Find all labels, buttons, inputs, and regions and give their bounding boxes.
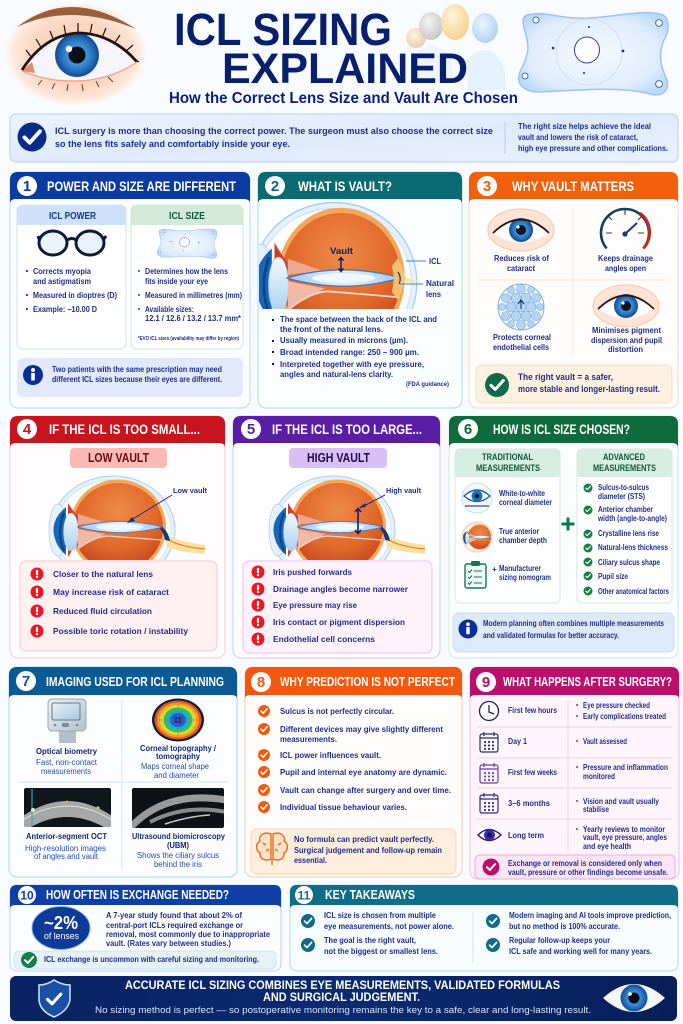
natural lens label: Natural	[426, 278, 454, 288]
eye cross-section: low vault	[48, 476, 205, 560]
footer statement	[95, 980, 591, 1016]
card: advanced measurements: ADVANCED	[603, 452, 645, 462]
card: advanced measurements: Crystalline lens rise	[598, 529, 659, 538]
badge 6: 6	[464, 421, 472, 438]
takeaway: right vault	[301, 936, 438, 956]
list: high vault risks	[243, 561, 432, 653]
badge 1	[17, 176, 37, 196]
topography text: and diameter	[154, 771, 199, 780]
natural lens label: lens	[426, 289, 441, 299]
list: high vault risks: Endothelial cell concerns	[273, 634, 375, 644]
callout: surgical judgement: essential.	[294, 855, 327, 865]
card: advanced measurements: Anterior chamber	[598, 505, 653, 514]
vault explanation: (FDA guidance)	[406, 381, 449, 388]
panel 10: how often is exchange needed	[10, 885, 281, 971]
callout: exchange uncommon	[14, 951, 276, 969]
benefit: drainage	[598, 254, 654, 273]
icon: ICL lens	[519, 13, 668, 95]
title	[174, 4, 468, 93]
badge 10	[18, 886, 36, 904]
eye cross-section: high vault	[268, 476, 425, 560]
image: anterior-segment OCT	[24, 788, 111, 827]
benefit: endothelium: endothelial cells	[493, 343, 549, 352]
list: high vault risks: Iris contact or pigment dispersion	[273, 617, 405, 627]
timeline: long term: and eye health	[583, 842, 631, 851]
benefit: pigment: distortion	[608, 345, 643, 354]
list: prediction limits: Vault can change after surgery and over time.	[280, 785, 451, 795]
panel 3: why vault matters	[469, 172, 678, 408]
timeline: long term: Yearly reviews to monitor	[583, 825, 665, 834]
header eye illustration	[1, 0, 151, 109]
callout: same prescription	[17, 358, 243, 397]
card: ICL size	[131, 205, 243, 349]
panel 4: ICL too small	[10, 416, 225, 658]
callout: right vault: more stable and longer-lasting result.	[518, 384, 660, 395]
icon: eye long term	[478, 830, 501, 840]
card: traditional measurements: sizing nomogram	[499, 573, 551, 582]
heading: IF THE ICL IS TOO SMALL...	[49, 421, 200, 437]
card: ICL power: Measured in dioptres (D)	[33, 291, 117, 300]
timeline: first few weeks: monitored	[583, 772, 615, 781]
footer statement: AND SURGICAL JUDGEMENT.	[263, 992, 420, 1004]
vault label and arrow: Vault	[330, 246, 354, 257]
badge 11: 11	[298, 888, 311, 902]
icon: eye pigment	[593, 285, 659, 327]
study text: A 7-year study found that about 2% of	[106, 911, 242, 920]
list: low vault risks: May increase risk of cataract	[53, 587, 169, 597]
heading: WHY PREDICTION IS NOT PERFECT	[280, 674, 455, 689]
card: traditional measurements: corneal diameter	[499, 498, 552, 507]
vault explanation: the front of the natural lens.	[280, 325, 383, 334]
card: ICL size: Measured in millimetres (mm)	[145, 291, 242, 300]
panel 7: imaging	[9, 667, 237, 877]
list: prediction limits: Sulcus is not perfectly circular.	[280, 706, 394, 716]
benefit: cataract	[494, 254, 549, 273]
icon: glasses	[38, 231, 106, 255]
list: high vault risks: Iris pushed forwards	[273, 567, 352, 577]
badge 2: 2	[271, 178, 279, 195]
vault explanation: Interpreted together with eye pressure,	[280, 360, 424, 369]
icon: eye cataract	[488, 209, 554, 251]
UBM text: Ultrasound biomicroscopy	[132, 832, 225, 841]
icon: white-to-white eye	[462, 483, 492, 513]
heading: IF THE ICL IS TOO LARGE...	[272, 421, 422, 437]
icon: anterior chamber	[461, 522, 495, 552]
card: ICL power: and astigmatism	[33, 277, 91, 286]
list: low vault risks: Possible toric rotation / instability	[53, 626, 188, 636]
timeline: 3-6 months	[508, 797, 659, 814]
study text	[106, 911, 271, 948]
list: low vault risks	[20, 561, 217, 651]
icon: clock	[480, 702, 498, 720]
timeline: first few weeks: Pressure and inflammation	[583, 763, 668, 772]
card: traditional measurements: White-to-white	[499, 489, 545, 498]
card: ICL size: Available sizes:	[145, 305, 194, 314]
badge 2	[265, 176, 285, 196]
card: traditional measurements	[455, 449, 560, 603]
UBM text: behind the iris	[154, 860, 202, 869]
list: low vault risks: Reduced fluid circulation	[53, 606, 152, 616]
footer banner	[10, 976, 677, 1021]
takeaway: right vault: The goal is the right vault,	[324, 936, 416, 945]
topography text: Maps corneal shape	[141, 762, 210, 771]
icon: corneal topography map	[152, 698, 204, 742]
vault label and arrow	[330, 246, 354, 272]
card: advanced measurements: Ciliary sulcus shape	[598, 558, 660, 567]
badge 8: 8	[257, 674, 265, 691]
callout: right vault: The right vault = a safer,	[518, 372, 613, 383]
panel 8: why prediction is not perfect	[245, 667, 462, 877]
intro banner: high eye pressure and other complications.	[518, 144, 668, 153]
list: high vault risks: Eye pressure may rise	[273, 600, 357, 610]
list: prediction limits: measurements.	[280, 734, 337, 744]
benefit: pigment: dispersion and pupil	[591, 336, 662, 345]
badge 8	[251, 672, 271, 692]
timeline: long term: vault, eye pressure, angles	[583, 833, 667, 842]
card: ICL size: ICL SIZE	[169, 211, 205, 222]
icon: calendar weeks	[480, 763, 498, 783]
card: ICL size: *EVO ICL sizes (availability may differ by region)	[138, 336, 239, 342]
vault explanation: angles and natural-lens clarity.	[280, 370, 393, 379]
topography text: tomography	[156, 752, 201, 761]
callout: modern planning: and validated formulas for better accuracy.	[483, 631, 619, 640]
timeline: 3-6 months: Vision and vault usually	[583, 797, 659, 806]
badge 10: 10	[20, 888, 34, 902]
benefit: endothelium: Protects corneal	[493, 333, 551, 342]
vault explanation: The space between the back of the ICL and	[280, 315, 437, 324]
callout: exchange or removal: Exchange or removal is considered only when	[508, 859, 662, 868]
timeline: first few weeks	[508, 763, 668, 781]
takeaway: multiple measurements	[301, 911, 454, 931]
vault explanation: Broad intended range: 250 – 900 µm.	[280, 348, 419, 357]
low vault pill	[70, 448, 167, 468]
heading: KEY TAKEAWAYS	[325, 888, 415, 902]
icon: calendar day 1	[480, 732, 498, 752]
panel 5: ICL too large	[233, 416, 440, 658]
takeaway: multiple measurements: eye measurements, not power alone.	[324, 922, 454, 931]
low vault arrow: Low vault	[173, 488, 208, 495]
takeaway: multiple measurements: ICL size is chosen from multiple	[324, 911, 436, 920]
takeaway: imaging and AI	[486, 911, 671, 931]
timeline: day 1	[508, 737, 627, 746]
card: traditional measurements: True anterior	[499, 527, 539, 536]
card: advanced measurements: Pupil size	[598, 572, 628, 581]
badge 9	[476, 672, 496, 692]
card: traditional measurements: MEASUREMENTS	[476, 463, 540, 473]
card: advanced measurements: Natural-lens thickness	[598, 543, 668, 552]
title: EXPLAINED	[222, 45, 468, 93]
intro banner: ICL surgery is more than choosing the correct power. The surgeon must also choose the correct size	[55, 126, 493, 137]
card: advanced measurements: diameter (STS)	[598, 492, 645, 501]
badge 7: 7	[22, 673, 30, 690]
callout: surgical judgement: Surgical judgement and follow-up remain	[294, 845, 442, 855]
benefit: pigment: Minimises pigment	[592, 326, 661, 335]
list: prediction limits: Different devices may give slightly different	[280, 724, 443, 734]
vault explanation: Usually measured in microns (µm).	[280, 336, 408, 345]
icon: shield	[39, 980, 70, 1017]
card: ICL power: ICL POWER	[49, 211, 97, 222]
intro banner: vault and lowers the risk of cataract,	[518, 133, 638, 142]
takeaway: imaging and AI: but no method is 100% accurate.	[509, 922, 620, 931]
stat: about 2 percent	[32, 906, 90, 950]
icon: clipboard	[465, 561, 486, 588]
ICL label	[406, 257, 441, 266]
badge 6	[458, 419, 478, 439]
vault explanation	[272, 315, 449, 388]
card: ICL power: Example: −10.00 D	[33, 305, 97, 314]
panel 9: after surgery timeline	[470, 667, 679, 879]
benefit: drainage: Keeps drainage	[598, 254, 654, 263]
callout: same prescription: different ICL sizes because their eyes are different.	[52, 375, 222, 384]
UBM text: (UBM)	[167, 841, 189, 850]
heading: WHY VAULT MATTERS	[512, 178, 634, 194]
topography text: Corneal topography /	[140, 744, 217, 753]
timeline: 3-6 months: 3–6 months	[508, 799, 551, 808]
study text: central-port ICLs required exchange or	[106, 921, 243, 930]
benefit: pigment	[591, 326, 662, 354]
badge 9: 9	[482, 674, 490, 691]
benefit: drainage: angles open	[605, 264, 646, 273]
optical biometry text: Optical biometry	[36, 747, 98, 756]
topography text	[140, 744, 217, 780]
badge 3	[477, 176, 497, 196]
list: high vault risks: Drainage angles become narrower	[273, 584, 409, 594]
takeaway: right vault: not the biggest or smallest lens.	[324, 947, 438, 956]
panel 11: key takeaways	[290, 885, 678, 971]
footer statement: ACCURATE ICL SIZING COMBINES EYE MEASUREMENTS, VALIDATED FORMULAS	[125, 980, 560, 992]
badge 7	[16, 671, 36, 691]
card: advanced measurements	[577, 449, 672, 603]
study text: removal, most commonly due to inappropriate	[106, 930, 271, 939]
list: low vault risks: Closer to the natural lens	[53, 569, 153, 579]
panel 6: how is ICL size chosen	[449, 416, 678, 658]
high vault arrows: High vault	[386, 488, 422, 495]
takeaway: follow-up: Regular follow-up keeps your	[509, 936, 610, 945]
timeline: day 1: Day 1	[508, 737, 527, 746]
card: ICL power: Corrects myopia	[33, 267, 91, 276]
OCT text: High-resolution images	[25, 844, 106, 853]
badge 3: 3	[483, 178, 491, 195]
callout: surgical judgement	[251, 829, 456, 874]
optical biometry text: measurements	[41, 767, 91, 776]
UBM text	[132, 832, 225, 869]
list: prediction limits	[258, 705, 451, 813]
timeline: 3-6 months: stabilise	[583, 805, 609, 814]
card: ICL power	[17, 205, 126, 349]
heading: HOW IS ICL SIZE CHOSEN?	[493, 421, 630, 437]
high vault arrows	[355, 488, 422, 534]
footer statement: No sizing method is perfect — so postoperative monitoring remains the key to a safe, clear and long-lasting result.	[95, 1005, 591, 1016]
title: ICL SIZING	[174, 4, 392, 55]
callout: surgical judgement: No formula can predict vault perfectly.	[294, 834, 434, 844]
optical biometry text: Fast, non-contact	[36, 758, 98, 767]
subtitle: How the Correct Lens Size and Vault Are Chosen	[169, 90, 518, 107]
badge 11	[295, 886, 313, 904]
card: traditional measurements: +	[492, 565, 497, 574]
list: prediction limits: ICL power influences vault.	[280, 750, 381, 760]
high vault pill: HIGH VAULT	[307, 450, 370, 465]
card: traditional measurements: chamber depth	[499, 536, 547, 545]
high vault pill	[289, 448, 387, 468]
icon: calendar months	[480, 793, 498, 813]
benefit: cataract: Reduces risk of	[494, 254, 549, 263]
callout: same prescription: Two patients with the same prescription may need	[52, 365, 222, 374]
callout: exchange or removal	[475, 855, 675, 879]
badge 4: 4	[23, 421, 32, 438]
image: ultrasound biomicroscopy	[130, 788, 226, 828]
card: ICL size: 12.1 / 12.6 / 13.2 / 13.7 mm*	[145, 314, 242, 323]
heading: HOW OFTEN IS EXCHANGE NEEDED?	[46, 888, 229, 902]
icon: plus	[562, 518, 574, 530]
low vault arrow	[127, 488, 208, 523]
takeaway: follow-up	[486, 936, 652, 956]
card: advanced measurements: MEASUREMENTS	[593, 463, 656, 473]
OCT text: Anterior-segment OCT	[26, 832, 107, 841]
optical biometry text	[36, 747, 98, 776]
timeline: first few hours: Eye pressure checked	[583, 701, 650, 710]
card: traditional measurements: Manufacturer	[499, 564, 541, 573]
intro banner: so the lens fits safely and comfortably inside your eye.	[55, 139, 290, 150]
benefit: cataract: cataract	[507, 264, 535, 273]
heading: WHAT IS VAULT?	[298, 178, 392, 194]
card: traditional measurements: TRADITIONAL	[482, 452, 533, 462]
panel 2: what is vault	[249, 172, 462, 408]
OCT text: of angles and vault	[34, 852, 99, 861]
low vault pill: LOW VAULT	[88, 450, 149, 465]
OCT text	[25, 832, 107, 861]
badge 4	[17, 419, 37, 439]
ICL label: ICL	[429, 257, 441, 266]
card: ICL size: fits inside your eye	[145, 277, 208, 286]
timeline: first few hours: First few hours	[508, 706, 557, 715]
timeline: day 1: Vault assessed	[583, 737, 627, 746]
icon: optical biometer	[48, 699, 86, 743]
icon: eye	[603, 984, 665, 1012]
badge 5: 5	[247, 421, 255, 438]
intro banner	[10, 114, 678, 162]
badge 1: 1	[23, 178, 31, 195]
intro banner: The right size helps achieve the ideal	[518, 122, 651, 131]
card: ICL size: Determines how the lens	[145, 267, 228, 276]
card: advanced measurements: Sulcus-to-sulcus	[598, 483, 649, 492]
takeaway: follow-up: ICL safe and working well for many years.	[509, 947, 652, 956]
timeline: first few weeks: First few weeks	[508, 768, 557, 777]
timeline: first few hours	[508, 701, 666, 721]
callout: right vault	[476, 365, 672, 403]
stat: about 2 percent: of lenses	[44, 931, 79, 941]
heading: POWER AND SIZE ARE DIFFERENT	[47, 178, 236, 194]
stat: about 2 percent: ~2%	[44, 913, 78, 933]
natural lens label	[400, 278, 454, 299]
icon: pressure gauge	[601, 209, 650, 248]
list: prediction limits: Pupil and internal eye anatomy are dynamic.	[280, 767, 447, 777]
heading: IMAGING USED FOR ICL PLANNING	[46, 674, 224, 689]
study text: vault. (Rates vary between studies.)	[106, 939, 231, 948]
eye cross-section	[259, 202, 420, 309]
icon: small lens	[157, 229, 217, 258]
card: advanced measurements: width (angle-to-angle)	[597, 514, 667, 523]
timeline: long term: Long term	[508, 831, 544, 840]
benefit: endothelium	[493, 333, 551, 352]
icon: brain	[257, 833, 287, 865]
badge 5	[241, 419, 261, 439]
decorative spheres behind the title	[406, 4, 505, 90]
panel 1: power and size	[10, 172, 250, 408]
callout: modern planning	[453, 613, 674, 652]
list: prediction limits: Individual tissue behaviour varies.	[280, 802, 407, 812]
callout: exchange uncommon: ICL exchange is uncommon with careful sizing and monitoring.	[44, 955, 259, 964]
UBM text: Shows the ciliary sulcus	[137, 851, 219, 860]
icon: corneal cells	[498, 284, 544, 330]
timeline: long term	[508, 825, 667, 851]
